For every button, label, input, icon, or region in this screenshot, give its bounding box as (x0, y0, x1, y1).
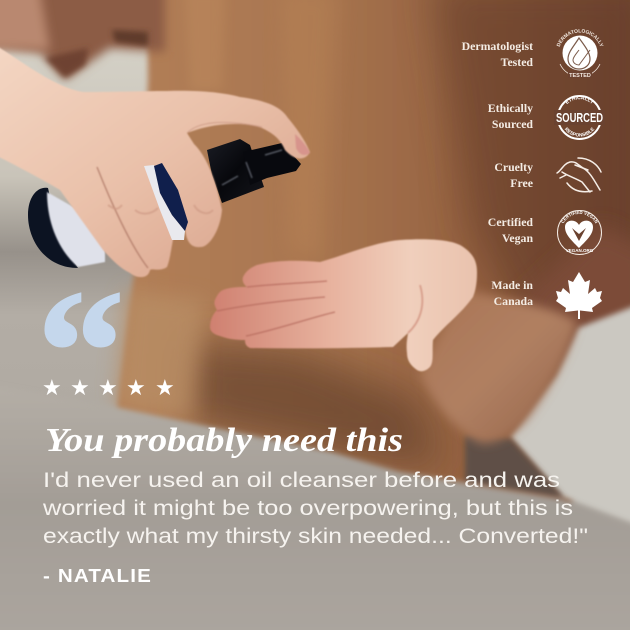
label: made in canada: Made in (491, 278, 533, 292)
label: certified vegan: Certified (488, 215, 533, 229)
review body (42, 468, 588, 548)
label: ethically sourced: Sourced (492, 117, 533, 131)
right light background (510, 300, 630, 530)
label: made in canada (491, 278, 533, 308)
badge: sourced: RESPONSIBLE (564, 127, 594, 137)
review body: worried it might be too overpowering, but this is (42, 496, 573, 520)
label: made in canada: Canada (494, 294, 533, 308)
label: certified vegan: Vegan (502, 231, 533, 245)
hand holding bottle (0, 45, 310, 277)
label: cruelty free (494, 160, 533, 190)
label: dermatologist tested: Tested (501, 55, 533, 69)
five star rating: ★ (70, 376, 90, 401)
icon: maple leaf (556, 272, 602, 319)
finger gaps (217, 281, 335, 336)
finger gaps (97, 167, 148, 268)
badge: dermatologically tested (556, 29, 604, 79)
badge: dermatologically tested: TESTED (569, 73, 591, 79)
label: ethically sourced (488, 101, 533, 131)
badge: sourced (556, 95, 603, 140)
table top (0, 384, 630, 630)
five star rating: ★ (42, 376, 62, 401)
badge: certified vegan: VEGAN.ORG (566, 248, 594, 253)
far upper arm (520, 225, 630, 360)
badge: dermatologically tested: DERMATOLOGICALLY (556, 29, 604, 47)
five star rating: ★ (126, 376, 146, 401)
bottle glass between fingers (144, 163, 188, 240)
table shadow (465, 435, 564, 498)
quote mark: “ (37, 254, 124, 448)
badge: certified vegan: CERTIFIED VEGAN (561, 211, 598, 224)
badge: certified vegan (557, 210, 602, 255)
label: certified vegan (488, 215, 533, 245)
forearm (420, 290, 577, 443)
badge: sourced: ETHICALLY (566, 97, 593, 104)
label: cruelty free: Free (510, 176, 533, 190)
label: dermatologist tested (462, 39, 533, 69)
label: ethically sourced: Ethically (488, 101, 533, 115)
review body: I'd never used an oil cleanser before and was (43, 468, 560, 492)
five star rating: ★ (155, 376, 175, 401)
bottle base (28, 139, 301, 268)
label: dermatologist tested: Dermatologist (462, 39, 533, 53)
icon: leaping rabbit (557, 158, 601, 192)
five star rating (42, 376, 175, 401)
open palm (210, 239, 477, 371)
reviewer name: - NATALIE (43, 566, 152, 586)
badge: sourced: SOURCED (556, 111, 603, 125)
review body: exactly what my thirsty skin needed... Converted!" (43, 524, 588, 548)
review title: You probably need this (45, 422, 403, 459)
five star rating: ★ (98, 376, 118, 401)
label: cruelty free: Cruelty (494, 160, 533, 174)
